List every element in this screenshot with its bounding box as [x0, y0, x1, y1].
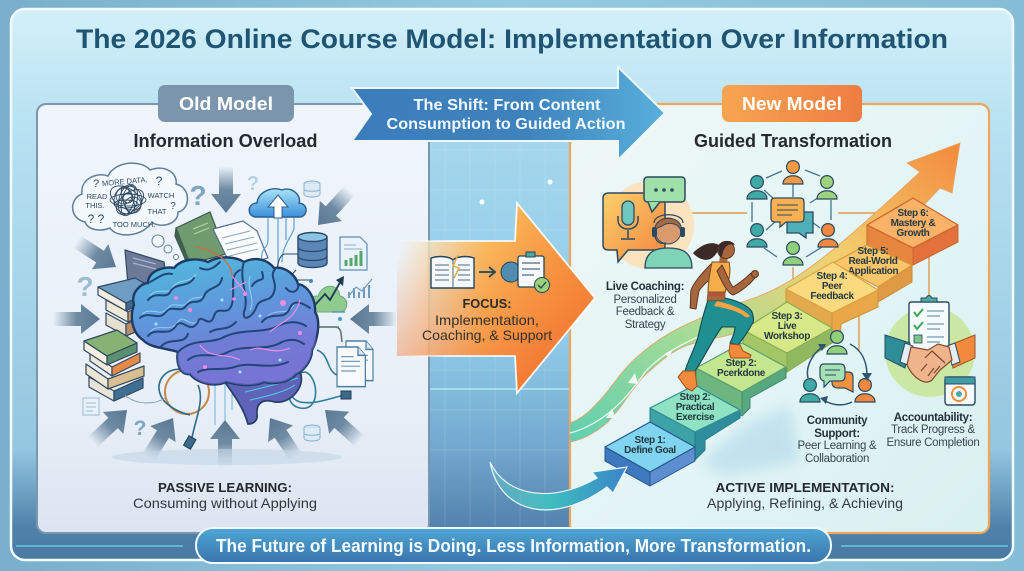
legging stripe [714, 301, 750, 318]
hair [693, 241, 735, 260]
step 6: Growth [897, 228, 930, 239]
caption: active implementation [707, 480, 903, 511]
brain folds [140, 262, 310, 372]
center strip [427, 103, 572, 533]
thought bubble: MORE DATA. [102, 175, 148, 188]
icon: green trend [304, 276, 372, 327]
arrow: the shift: The Shift: From Content [414, 97, 600, 114]
step 2b [696, 343, 786, 416]
temporal lobe shade [177, 323, 316, 385]
old model badge [158, 85, 294, 122]
text: live coaching: Feedback & [616, 306, 675, 318]
icon: document stack [337, 341, 373, 387]
step 2a: Step 2: [680, 392, 710, 403]
step 4: Peer [822, 281, 843, 292]
arrow: the shift [352, 67, 665, 160]
banner [196, 528, 831, 563]
step 4: Feedback [810, 291, 854, 302]
brain [132, 247, 318, 424]
blue swoop arrow [490, 462, 627, 510]
step 2b: Pcerkdone [717, 368, 766, 379]
text: community support: Support: [814, 428, 860, 440]
old model badge: Old Model [179, 94, 273, 114]
thought bubble: ? [93, 178, 99, 190]
staircase steps [605, 198, 958, 486]
text: community support: Community [807, 415, 868, 427]
text: live coaching [606, 281, 684, 331]
right arm [717, 265, 755, 295]
head [719, 256, 728, 263]
icon: usb plugs [184, 391, 351, 449]
leggings [685, 298, 754, 371]
step 4: Step 4: [817, 271, 847, 282]
thought bubble: THAT [147, 207, 167, 216]
heading: guided transformation: Guided Transformation [694, 131, 892, 151]
new model badge [722, 85, 862, 122]
step 3: Live [778, 321, 797, 332]
panel: new model [490, 85, 989, 533]
left arm [690, 264, 716, 309]
question marks: ? [76, 271, 94, 302]
step 2a: Exercise [676, 412, 715, 423]
caption: passive learning: PASSIVE LEARNING: [158, 480, 292, 495]
step 2b: Step 2: [726, 358, 756, 369]
icon: small database top [304, 181, 320, 197]
step 5: Step 5: [858, 246, 888, 257]
text: live coaching: Live Coaching: [606, 281, 684, 293]
step 1: Define Goal [624, 445, 676, 456]
heading: information overload: Information Overload [134, 131, 318, 151]
icon: cloud upload with cables [249, 189, 313, 290]
step 5 [833, 245, 912, 302]
thought bubble: THIS. [85, 201, 105, 210]
cerebellum and stem [222, 372, 301, 424]
step 6: Step 6: [898, 208, 928, 219]
step 1: Step 1: [635, 435, 665, 446]
caption: passive learning: Consuming without Applying [133, 495, 317, 511]
thought bubble: ? ? [88, 212, 105, 226]
title: The 2026 Online Course Model: Implementation Over Information [76, 24, 948, 54]
text: community support: Collaboration [805, 453, 869, 465]
connector lines [692, 213, 929, 350]
step 1 [605, 422, 695, 486]
question marks: ? [189, 180, 207, 211]
hand [752, 270, 758, 278]
brain highlights [142, 274, 294, 332]
step 5: Real-World [848, 256, 898, 267]
step 2a: Practical [676, 402, 715, 413]
icon: database [298, 232, 327, 268]
path ramp to arrow [570, 143, 960, 442]
orange cable [196, 247, 232, 276]
bottom circuit lines [16, 545, 1008, 547]
lower stack [89, 377, 114, 401]
text: accountability [886, 412, 980, 449]
thought bubble: TOO MUCH. [113, 220, 155, 229]
text: live coaching: Strategy [625, 319, 666, 331]
question marks [76, 173, 259, 440]
thought bubble [73, 163, 188, 260]
text: accountability: Ensure Completion [886, 437, 980, 449]
step 6 [867, 198, 958, 265]
icon: book stacks [84, 250, 167, 401]
step 2a [650, 385, 740, 460]
question marks: ? [247, 173, 259, 195]
icon: live coaching [603, 177, 694, 269]
text: community support: Peer Learning & [798, 440, 877, 452]
arrow: focus [397, 203, 595, 393]
icon: accountability [885, 296, 975, 405]
icon: community support [800, 331, 875, 405]
torso [708, 262, 730, 293]
shadow under brain [112, 449, 342, 465]
thought bubble: READ [87, 192, 108, 201]
question marks: ? [134, 417, 146, 440]
icon: small database bottom [304, 425, 320, 441]
arrow: focus: Coaching, & Support [422, 327, 552, 343]
text: live coaching: Personalized [613, 294, 677, 306]
step 6: Mastery & [891, 218, 935, 229]
back shoe [678, 371, 697, 391]
icon: chart document [340, 237, 367, 270]
banner: The Future of Learning is Doing. Less Information, More Transformation. [216, 536, 811, 556]
arrow: the shift: Consumption to Guided Action [386, 116, 626, 133]
runner [678, 241, 758, 391]
arrow: focus: FOCUS: [462, 296, 512, 311]
text: accountability: Track Progress & [891, 424, 976, 436]
caption: active implementation: ACTIVE IMPLEMENTATION: [716, 480, 894, 495]
arrow: focus: Implementation, [435, 312, 539, 328]
step 3: Step 3: [772, 311, 802, 322]
icon: green book and paper [175, 212, 268, 270]
text: accountability: Accountability: [894, 412, 972, 424]
step 4 [786, 262, 878, 343]
caption: passive learning [133, 480, 317, 511]
new model badge: New Model [742, 94, 842, 114]
floor shadow [700, 405, 800, 476]
cables [125, 327, 345, 438]
front shoe [729, 344, 751, 358]
icon: open book to checklist [431, 252, 550, 292]
incoming arrows [53, 166, 397, 467]
panel: old model [37, 85, 429, 533]
upper stack [98, 287, 126, 311]
caption: active implementation: Applying, Refining, & Achieving [707, 495, 903, 511]
thought bubble: WATCH [148, 191, 174, 200]
thought bubble: ? [170, 201, 176, 212]
icon: small doc [83, 398, 99, 415]
step 5: Application [848, 266, 899, 277]
text: community support [798, 415, 877, 465]
icon: people ring [747, 161, 838, 265]
thought bubble: ? [156, 174, 163, 188]
step 3 [743, 302, 832, 372]
step 3: Workshop [764, 331, 810, 342]
